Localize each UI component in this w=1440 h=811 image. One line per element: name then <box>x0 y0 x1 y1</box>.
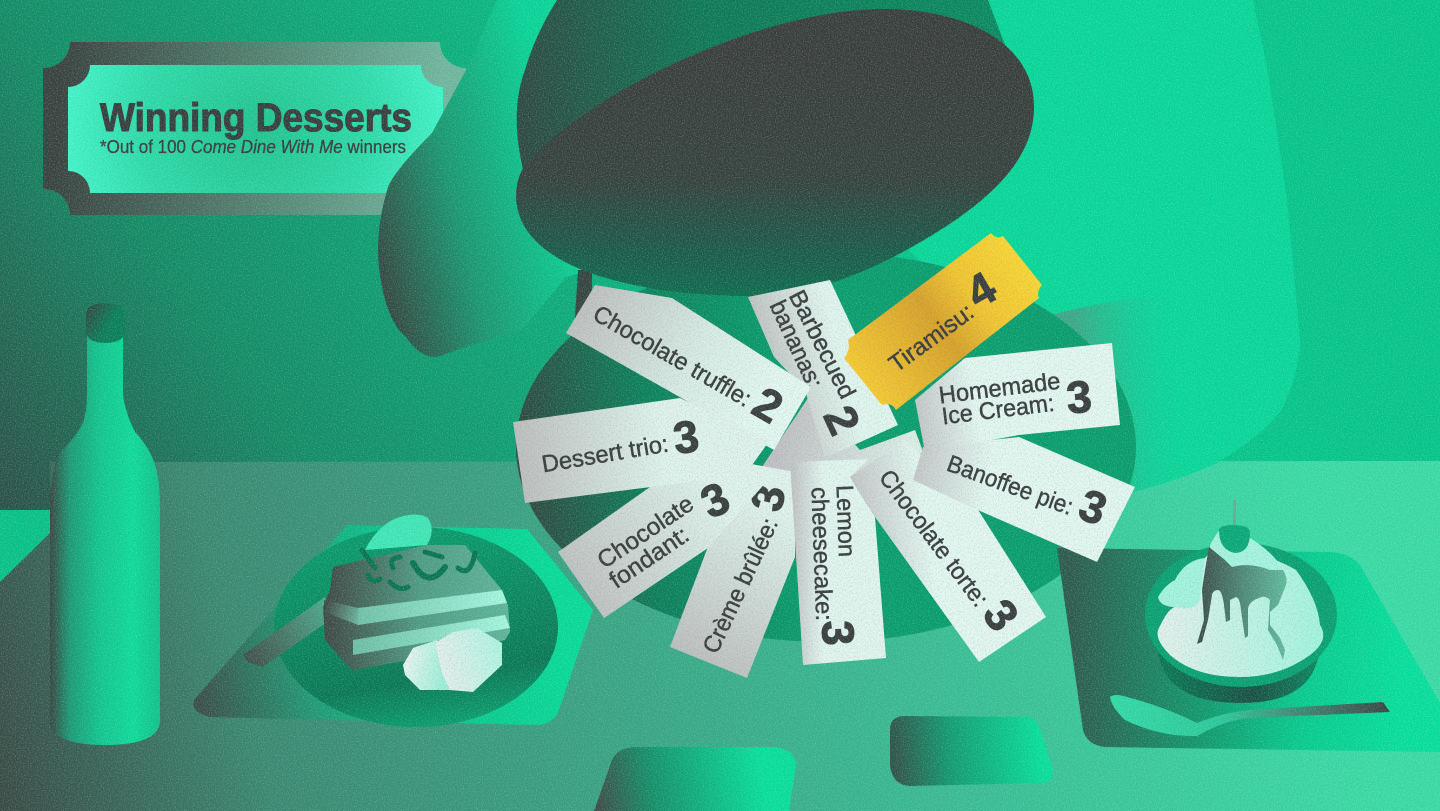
label: Banoffee pie: <box>943 450 1077 521</box>
label: Dessert trio: <box>540 431 670 478</box>
ticket: chocolate torte <box>850 440 1046 662</box>
value: 2 <box>744 377 792 433</box>
bottom left dish <box>594 747 796 811</box>
leaf garnish <box>365 514 432 550</box>
ticket: barbecued bananas <box>748 280 898 458</box>
bottle cap <box>86 303 125 343</box>
cake side layers <box>324 600 358 625</box>
ticket: creme brulee <box>670 462 796 678</box>
label: Chocolate <box>592 490 699 574</box>
label: Homemade <box>937 368 1062 409</box>
right placemat <box>1057 548 1440 752</box>
value: 3 <box>740 480 796 516</box>
left placemat <box>193 525 593 725</box>
label line two: fondant: <box>604 521 694 594</box>
cream band upper <box>358 590 507 625</box>
ice cream mound <box>1158 540 1323 677</box>
cloche lid interior <box>516 9 1034 296</box>
value: 3 <box>1073 479 1113 535</box>
ticket: lemon cheesecake <box>790 459 886 665</box>
subtitle text: *Out of 100 Come Dine With Me winners <box>100 137 406 157</box>
ticket wheel centre <box>760 395 930 480</box>
large meringue <box>435 628 502 692</box>
chocolate sprinkles <box>362 550 475 589</box>
bottom centre dish <box>890 716 1053 786</box>
label line two: bananas: <box>764 296 828 393</box>
bowl rim <box>1145 543 1337 687</box>
caramel sauce <box>1197 547 1287 660</box>
ticket: tiramisu winner <box>844 233 1042 410</box>
value: 3 <box>812 620 864 646</box>
wine bottle <box>50 303 160 745</box>
value: 3 <box>1064 371 1094 423</box>
label: Lemon <box>831 485 860 557</box>
title text: Winning Desserts <box>100 96 412 140</box>
bowl base <box>1157 640 1320 703</box>
ticket: banoffee pie <box>913 437 1135 562</box>
ticket inner panel <box>68 65 443 193</box>
diner body and arm <box>378 0 1300 492</box>
label: Chocolate truffle: <box>588 300 756 413</box>
label line two: Ice Cream: <box>940 390 1056 430</box>
cake silhouette <box>323 545 510 670</box>
ticket: homemade ice cream <box>915 343 1120 452</box>
label: Tiramisu: <box>884 298 979 378</box>
label line two: cheesecake: <box>806 487 837 621</box>
whipped peak <box>1210 525 1283 570</box>
ticket: dessert trio <box>513 398 770 503</box>
cream band lower <box>353 615 510 655</box>
arm fold shadow <box>1050 265 1217 492</box>
label: Chocolate torte: <box>873 465 993 612</box>
value: 3 <box>670 410 702 464</box>
value: 3 <box>693 472 737 528</box>
cherry stem <box>1233 500 1236 526</box>
spoon <box>1110 695 1390 736</box>
ticket: chocolate truffle <box>566 285 811 450</box>
meringues <box>403 628 502 692</box>
bottle body <box>50 335 160 745</box>
ticket frame <box>43 42 466 215</box>
knife <box>243 597 330 667</box>
cloche lid outer <box>517 0 1005 260</box>
layered cake slice <box>323 545 510 670</box>
value: 4 <box>957 262 1005 318</box>
value: 2 <box>814 398 870 442</box>
cream dollop <box>1158 558 1205 608</box>
ticket: chocolate fondant <box>558 450 768 618</box>
plate back stem <box>572 270 592 362</box>
small meringue <box>403 640 458 690</box>
label: Barbecued <box>783 286 861 403</box>
value: 3 <box>973 590 1029 640</box>
label: Crème brûlée: <box>698 514 784 658</box>
cherry <box>1219 525 1250 553</box>
left dessert plate <box>274 527 558 727</box>
ice cream bowl <box>1145 500 1337 703</box>
tablecloth corner <box>0 510 50 582</box>
title ticket <box>43 42 466 215</box>
large serving plate <box>516 252 1136 642</box>
table surface <box>0 461 1440 811</box>
